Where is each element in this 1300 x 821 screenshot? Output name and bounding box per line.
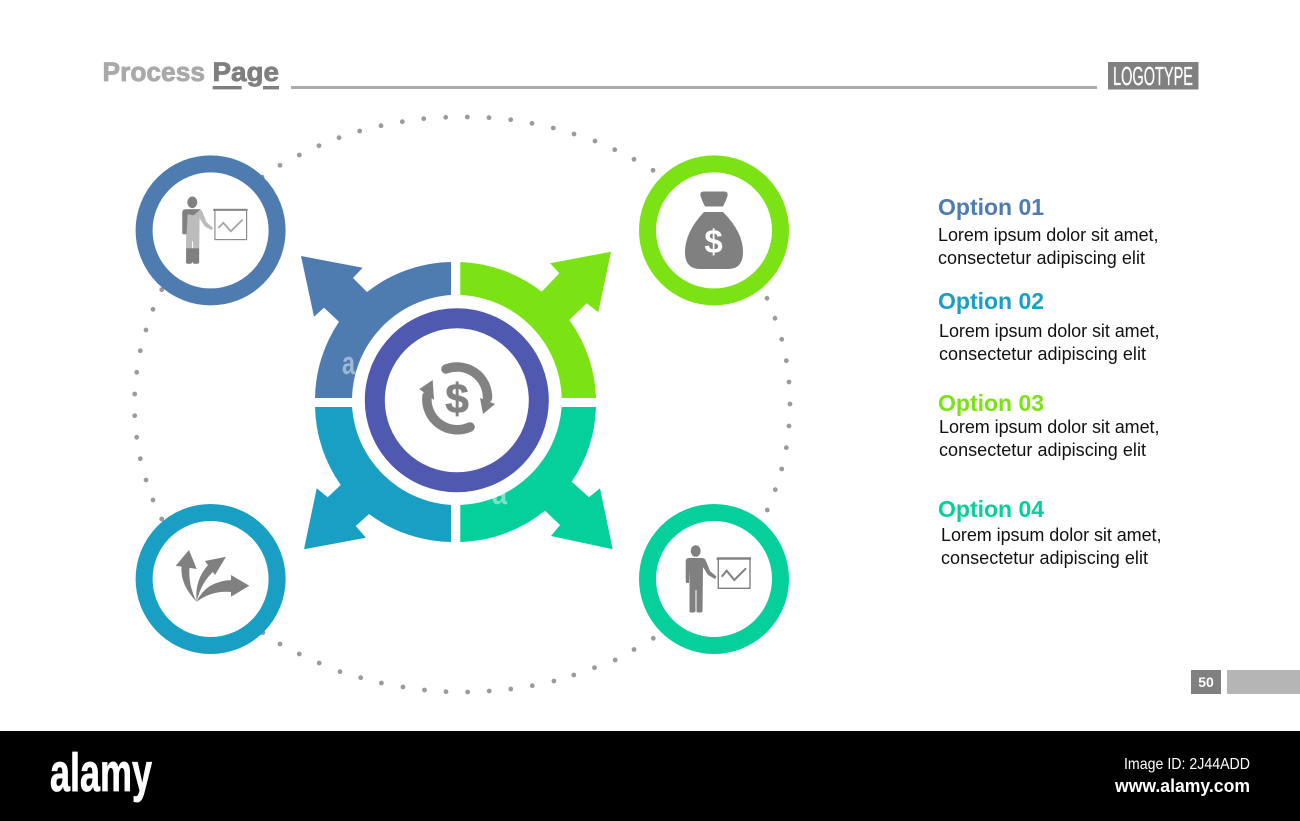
- circle: option 01 presenter: [144, 164, 277, 297]
- legend: option 03: Option 03: [938, 390, 1044, 416]
- watermark glyphs: a: [492, 475, 507, 511]
- legend: option 01: Lorem ipsum dolor sit amet,: [938, 225, 1158, 245]
- title: [102, 57, 279, 89]
- title: Process: [102, 57, 205, 87]
- legend: option 01: [938, 194, 1158, 268]
- dotted ellipse: [135, 117, 790, 692]
- central ring: [375, 318, 539, 482]
- watermark glyphs: a: [642, 605, 655, 630]
- legend: option 04: Option 04: [938, 496, 1044, 522]
- legend: option 02: consectetur adipiscing elit: [939, 344, 1146, 364]
- circle: option 04 presenter: [648, 512, 780, 646]
- icon: three curved arrows: [176, 550, 249, 602]
- legend: option 01: consectetur adipiscing elit: [938, 248, 1145, 268]
- circle: option 02 money bag: [648, 164, 780, 297]
- legend: option 02: Lorem ipsum dolor sit amet,: [939, 321, 1160, 341]
- icon: dollar with circular arrows: $: [445, 375, 469, 422]
- logotype badge: [1108, 61, 1198, 91]
- legend: option 02: [938, 288, 1160, 364]
- legend: option 03: consectetur adipiscing elit: [939, 440, 1146, 460]
- icon: money bag: $: [704, 223, 723, 260]
- legend: option 04: consectetur adipiscing elit: [941, 548, 1148, 568]
- title: Page: [212, 57, 279, 87]
- arrow segment: mint, bottom right: [460, 407, 613, 549]
- legend: option 02: Option 02: [938, 288, 1044, 314]
- legend: option 04: Lorem ipsum dolor sit amet,: [941, 525, 1162, 545]
- logotype badge: LOGOTYPE: [1113, 61, 1193, 91]
- page number: 50: [1198, 674, 1214, 690]
- circle: option 03 diverging arrows: [144, 512, 277, 646]
- central arrow diagram: [301, 252, 613, 549]
- footer url: www.alamy.com: [1114, 776, 1250, 796]
- footer brand: alamy: [50, 743, 152, 803]
- arrow segment: teal, bottom left: [304, 407, 451, 549]
- icon: dollar with circular arrows: [419, 367, 495, 430]
- legend: option 03: [938, 390, 1160, 460]
- arrow segment: green, top right: [460, 252, 611, 398]
- footer bar: [0, 731, 1300, 821]
- footer image id: Image ID: 2J44ADD: [1124, 756, 1250, 773]
- icon: presenter with chart: [182, 196, 248, 264]
- legend: option 04: [938, 496, 1162, 568]
- arrow segment: blue, top left: [301, 256, 451, 398]
- icon: presenter with chart: [686, 545, 751, 612]
- page number: [1191, 670, 1221, 694]
- watermark glyphs: a: [342, 345, 355, 381]
- legend: option 03: Lorem ipsum dolor sit amet,: [939, 417, 1160, 437]
- legend: option 01: Option 01: [938, 194, 1044, 220]
- watermark glyphs: [342, 345, 655, 630]
